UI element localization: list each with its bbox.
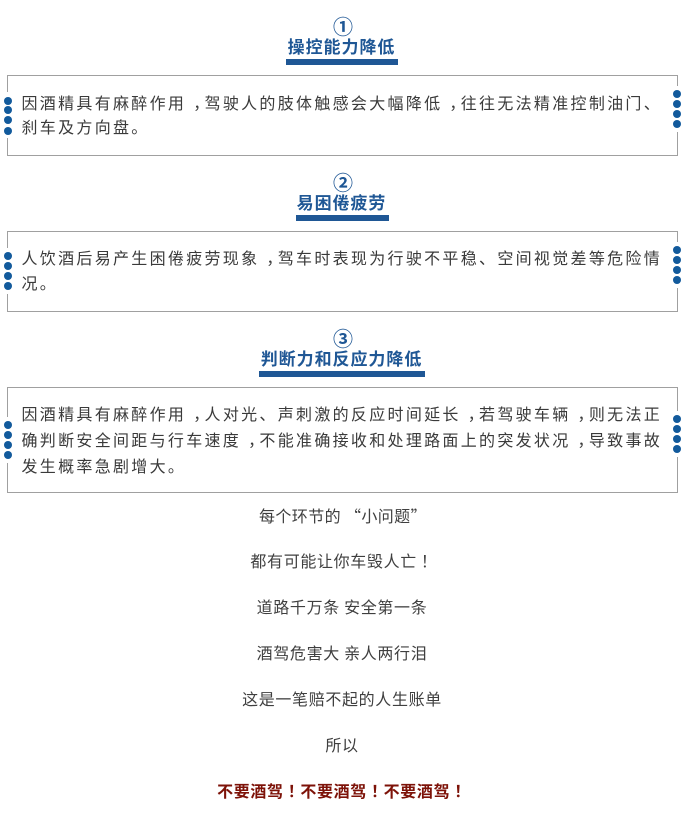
heading underline 1 — [286, 59, 398, 65]
closing message — [217, 503, 471, 802]
line: 人生账单: 这是一笔赔不起的人生账单 — [242, 686, 442, 710]
right dots 1 — [673, 86, 681, 132]
body text 2: 况。 — [22, 276, 58, 293]
heading underline 2 — [296, 215, 389, 221]
number badge 3: ③ — [333, 329, 353, 351]
body text 3 — [22, 406, 662, 476]
body text 2: 人饮酒后易产生困倦疲劳现象 ，驾车时表现为行驶不平稳、空间视觉差等危险情 — [22, 251, 662, 268]
body text 1: 因酒精具有麻醉作用 ，驾驶人的肢体触感会大幅降低 ，往往无法精准控制油门、 — [22, 96, 662, 113]
number badge 2: ② — [333, 173, 353, 195]
panel: text box 3 — [7, 387, 678, 493]
body text 2 — [22, 250, 662, 293]
section 2 — [4, 172, 681, 312]
left dots 3 — [4, 417, 12, 463]
number badge 1: ① — [333, 17, 353, 39]
body text 1 — [22, 95, 662, 137]
line: 所以: 所以 — [325, 732, 359, 756]
left dots 2 — [4, 248, 12, 294]
right dots 2 — [673, 242, 681, 288]
body text 3: 确判断安全间距与行车速度 ，不能准确接收和处理路面上的突发状况 ，导致事故 — [22, 432, 662, 450]
warning: 不要酒驾: 不要酒驾！不要酒驾！不要酒驾！ — [217, 778, 471, 802]
line: 小问题: 每个环节的 “小问题” — [259, 503, 427, 527]
line: 车毁人亡: 都有可能让你车毁人亡！ — [250, 548, 438, 572]
heading 2: 易困倦疲劳 — [297, 194, 386, 213]
panel: text box 1 — [7, 75, 678, 156]
line: 酒驾危害大: 酒驾危害大 亲人两行泪 — [257, 640, 427, 664]
heading 1: 操控能力降低 — [288, 38, 395, 57]
body text 3: 发生概率急剧增大。 — [22, 459, 186, 476]
right dots 3 — [673, 411, 681, 457]
heading 3: 判断力和反应力降低 — [261, 350, 422, 369]
line: 道路千万条: 道路千万条 安全第一条 — [257, 594, 427, 618]
heading underline 3 — [259, 371, 425, 377]
section 3 — [4, 328, 681, 493]
section 1 — [4, 16, 681, 156]
left dots 1 — [4, 92, 12, 138]
body text 1: 刹车及方向盘。 — [22, 120, 150, 137]
body text 3: 因酒精具有麻醉作用 ，人对光、声刺激的反应时间延长 ，若驾驶车辆 ，则无法正 — [22, 407, 662, 424]
panel: text box 2 — [7, 231, 678, 312]
